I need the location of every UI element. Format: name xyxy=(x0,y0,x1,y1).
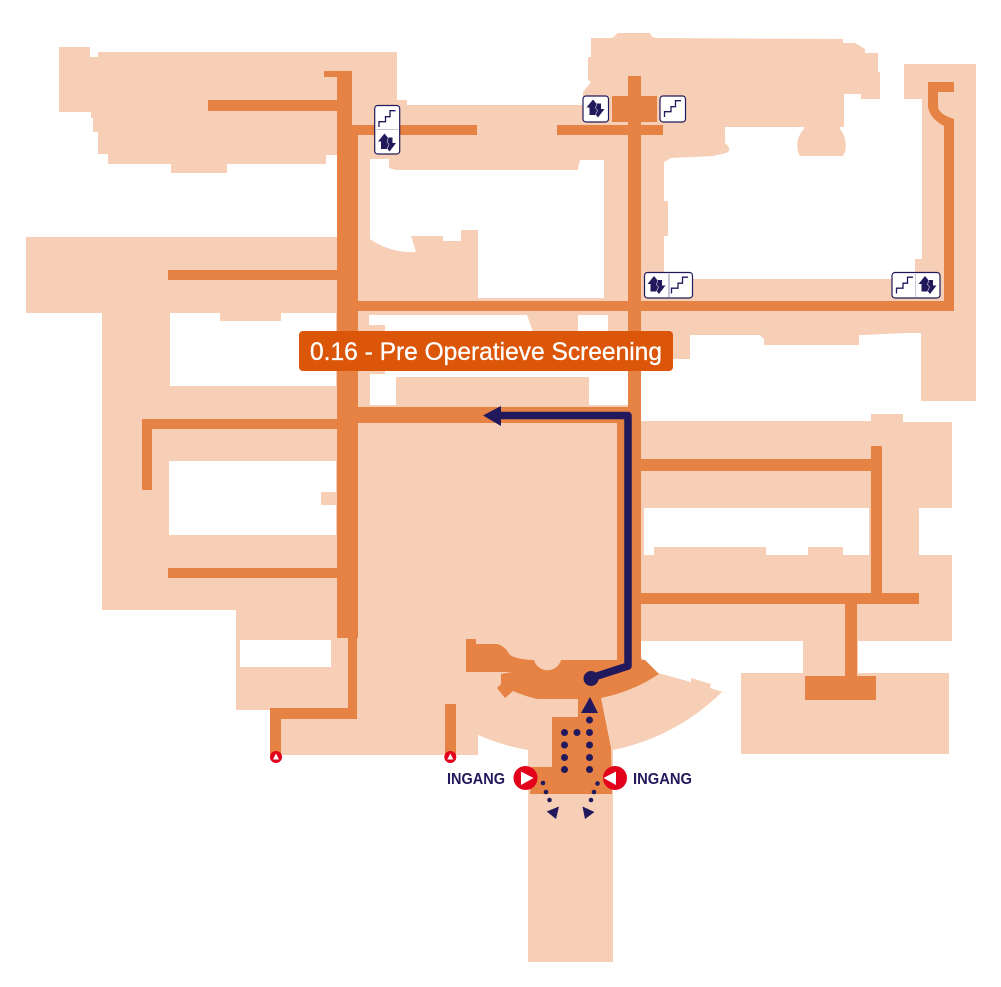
stairs box xyxy=(660,96,686,122)
icon: lift north xyxy=(583,96,608,122)
icon: stairs and lift north west xyxy=(375,106,400,154)
east-west corridor xyxy=(358,301,954,311)
lift symbol xyxy=(648,276,666,294)
arrow: exit right xyxy=(582,806,594,819)
stairs glyph xyxy=(379,111,396,127)
exit circle xyxy=(270,751,282,763)
west branch corridors xyxy=(142,100,338,578)
lift box xyxy=(583,96,608,122)
corridors xyxy=(142,71,954,794)
courtyard: east xyxy=(644,508,869,555)
arrow: exit left xyxy=(547,806,559,819)
icon: entrance triangle xyxy=(521,772,534,785)
north lift lobby xyxy=(557,96,663,135)
centre vertical corridor xyxy=(617,76,641,662)
south stub corridor xyxy=(445,704,456,755)
lift glyph xyxy=(378,134,396,152)
route start dot xyxy=(584,671,598,686)
west main corridor xyxy=(270,71,477,755)
exit disc xyxy=(444,751,456,763)
label background xyxy=(299,331,673,371)
icon: entrance marker xyxy=(514,766,538,790)
icon box xyxy=(375,106,400,154)
route line xyxy=(483,406,628,686)
icon: stairs and lift east xyxy=(892,272,940,298)
route arrowhead xyxy=(483,406,501,426)
route path xyxy=(495,416,628,678)
frame divider xyxy=(914,274,916,297)
entrance label: INGANG xyxy=(633,771,692,788)
entrance text: INGANG xyxy=(447,771,505,788)
north east corridor xyxy=(928,82,954,311)
east wing corridors xyxy=(641,446,919,700)
courtyard: west lower xyxy=(169,461,336,535)
icon: lift and stairs centre xyxy=(644,272,692,298)
exit arrow xyxy=(447,754,453,760)
arrow: entrance up xyxy=(581,697,598,713)
entrance west xyxy=(447,766,538,790)
walking route dots xyxy=(541,697,600,819)
entrance east xyxy=(603,766,692,790)
divider xyxy=(376,128,398,130)
combined box xyxy=(644,272,692,298)
entrance marker xyxy=(603,766,627,790)
icon: stairs north xyxy=(660,96,686,122)
entrance hall xyxy=(466,630,659,794)
exit triangle xyxy=(273,754,279,760)
courtyard: south west xyxy=(240,640,331,667)
stairs icon xyxy=(896,277,913,294)
stairs symbol xyxy=(672,277,688,294)
corridor 0.16 xyxy=(357,407,629,423)
destination label xyxy=(299,331,673,371)
stairs steps xyxy=(664,101,681,117)
side exit marker east xyxy=(444,751,456,763)
lift icon xyxy=(918,276,936,294)
entrance triangle xyxy=(604,772,616,785)
dotted path xyxy=(541,716,600,802)
courtyard: centre xyxy=(369,315,628,405)
courtyard: west upper xyxy=(170,313,336,386)
courtyard: north centre xyxy=(370,159,604,298)
side exit marker west xyxy=(270,751,282,763)
lift arrows xyxy=(586,100,604,118)
box divider xyxy=(668,274,670,297)
label text: 0.16 - Pre Operatieve Screening xyxy=(310,338,662,366)
combined frame xyxy=(892,272,940,298)
